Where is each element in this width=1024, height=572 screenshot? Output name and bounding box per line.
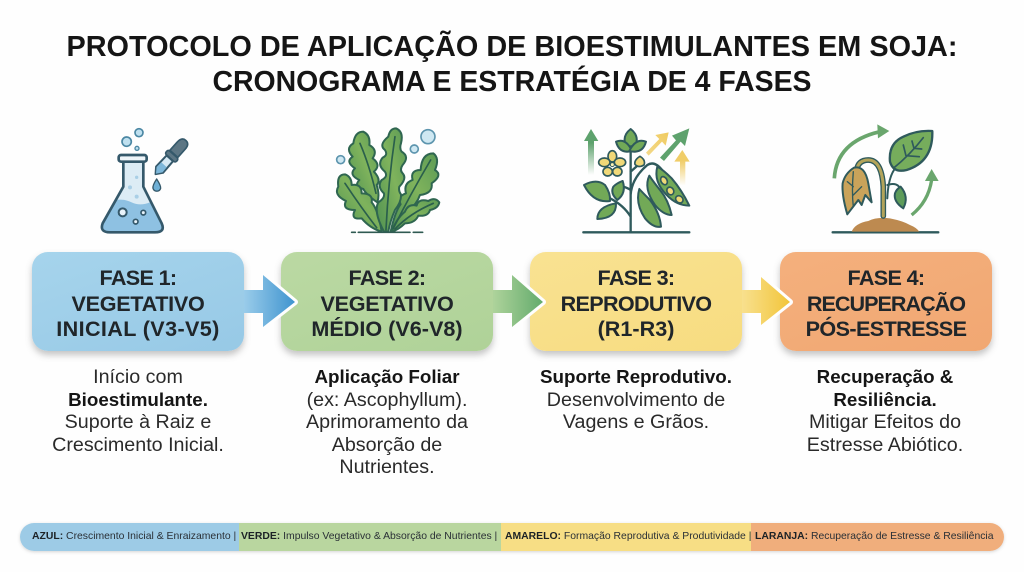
title: PROTOCOLO DE APLICAÇÃO DE BIOESTIMULANTES EM SOJA: (66, 31, 958, 63)
title: CRONOGRAMA E ESTRATÉGIA DE 4 FASES (212, 66, 812, 98)
phase 3 description: Desenvolvimento de (547, 388, 725, 410)
phase 3 description: Suporte Reprodutivo. (540, 366, 732, 387)
phase 1 box (32, 252, 244, 351)
phase 1 description (52, 366, 224, 456)
icon: recovering plant (833, 124, 939, 232)
icon: soybean plant with pods (583, 128, 690, 232)
phase 1 description: Suporte à Raiz e (65, 411, 211, 433)
phase 3 description (540, 366, 732, 433)
title (66, 30, 958, 98)
phase 1 box: FASE 1: (100, 265, 176, 290)
phase 1 description: Bioestimulante. (68, 388, 208, 410)
legend: amarelo: AMARELO: Formação Reprodutiva & Produtividade | (505, 531, 751, 542)
legend: azul: AZUL: Crescimento Inicial & Enraizamento | (32, 531, 236, 542)
phase 4 box: PÓS-ESTRESSE (806, 316, 966, 341)
phase 4 box: FASE 4: (848, 265, 924, 290)
phase 3 box (530, 252, 742, 351)
phase 3 box: (R1-R3) (598, 316, 674, 341)
phase 2 description: Aplicação Foliar (314, 366, 460, 387)
phase 2 description: Aprimoramento da (306, 411, 468, 433)
phase 4 description: Estresse Abiótico. (807, 434, 963, 456)
legend bar (20, 523, 1004, 551)
phase 2 description: Absorção de (332, 434, 442, 456)
legend: verde: VERDE: Impulso Vegetativo & Absorção de Nutrientes | (241, 531, 497, 542)
phase 4 description (807, 366, 963, 456)
phase 2 box: VEGETATIVO (320, 291, 453, 316)
phase 2 box: FASE 2: (349, 265, 425, 290)
phase 3 box: REPRODUTIVO (561, 291, 711, 316)
arrow: phase 1 to 2 (244, 275, 295, 327)
icon: seaweed (337, 128, 439, 232)
phase 3 box: FASE 3: (598, 265, 674, 290)
phase 4 description: Resiliência. (833, 388, 937, 410)
phase 4 box (780, 252, 992, 351)
phase 2 description (306, 366, 468, 478)
arrow: phase 3 to 4 (742, 277, 790, 325)
phase 1 description: Crescimento Inicial. (52, 434, 224, 456)
phase 2 box: MÉDIO (V6-V8) (311, 316, 463, 341)
phase 3 description: Vagens e Grãos. (563, 411, 709, 433)
phase 4 box: RECUPERAÇÃO (807, 291, 965, 316)
phase 1 box: VEGETATIVO (72, 291, 204, 316)
phase 4 description: Recuperação & (817, 366, 953, 387)
phase 1 box: INICIAL (V3-V5) (56, 316, 220, 341)
icon: flask and dropper (102, 129, 191, 232)
phase 4 description: Mitigar Efeitos do (809, 411, 961, 433)
phase 1 description: Início com (93, 366, 183, 388)
legend: laranja: LARANJA: Recuperação de Estresse & Resiliência (755, 531, 994, 542)
phase 2 description: (ex: Ascophyllum). (307, 388, 467, 410)
phase 2 box (281, 252, 493, 351)
arrow: phase 2 to 3 (493, 275, 543, 327)
phase 2 description: Nutrientes. (339, 456, 435, 478)
